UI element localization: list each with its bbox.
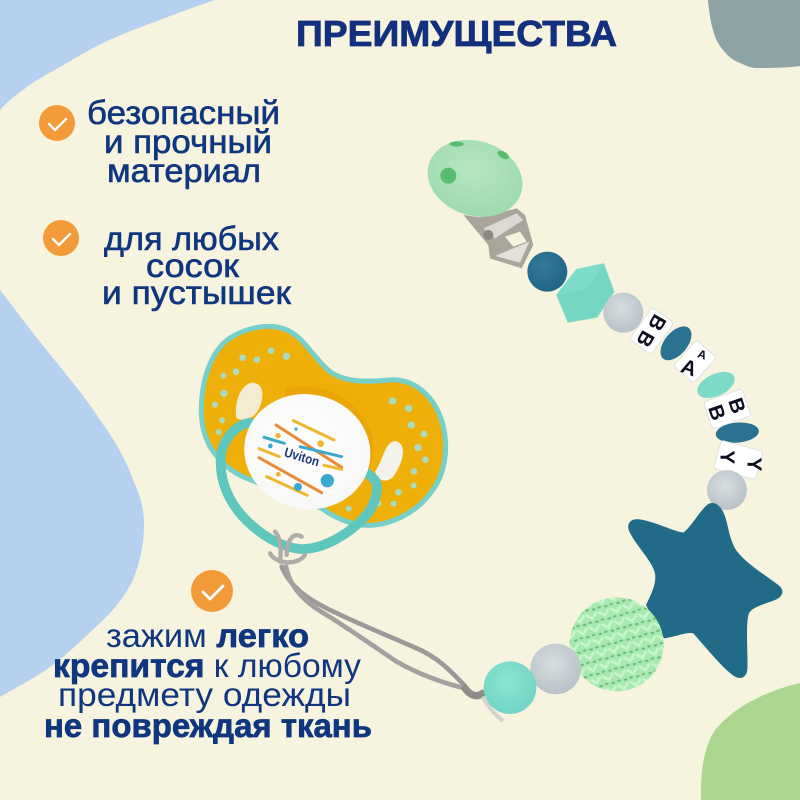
cube: B: B xyxy=(643,310,670,335)
cube: A: A xyxy=(696,347,709,363)
text: benefit 1: безопасный xyxy=(87,94,280,131)
text: benefit 2: для любых xyxy=(104,220,280,257)
title: ПРЕИМУЩЕСТВА xyxy=(296,13,617,54)
bead: grey lower xyxy=(707,470,747,510)
cube: B: B xyxy=(703,402,730,424)
text: benefit 3: не повреждая ткань xyxy=(44,707,372,744)
disc: mint xyxy=(693,367,739,403)
star bead xyxy=(628,503,782,678)
cube: Y xyxy=(711,439,771,482)
tail xyxy=(483,698,502,720)
shield xyxy=(201,326,446,525)
bead: silver xyxy=(530,644,581,694)
pacifier xyxy=(201,326,446,549)
button print xyxy=(259,421,342,495)
cube: A xyxy=(670,339,717,387)
blob: left blue xyxy=(0,290,144,697)
cube: B xyxy=(701,388,752,430)
text: benefit 3: предмету одежды xyxy=(58,676,351,713)
text: benefit 1 xyxy=(87,94,280,189)
wooden clip top xyxy=(417,128,532,229)
bead: grey xyxy=(603,293,643,333)
star and beads xyxy=(484,503,782,714)
cord strands xyxy=(282,567,465,686)
text: benefit 1: материал xyxy=(107,152,261,189)
cube: Y: Y xyxy=(716,450,739,464)
benefit 1 xyxy=(39,94,280,189)
logo: Uviton xyxy=(282,445,321,469)
icon: check 3 xyxy=(191,570,233,612)
cube: B: B xyxy=(723,395,750,417)
benefit 2 xyxy=(43,220,292,311)
icon: check 2 xyxy=(43,220,79,256)
metal clip xyxy=(463,208,533,268)
clip chain xyxy=(417,128,771,482)
text: benefit 2: и пустышек xyxy=(102,274,292,311)
cube: Y: Y xyxy=(743,458,766,472)
icon: check 1 xyxy=(39,105,75,141)
button xyxy=(233,382,381,521)
text: benefit 2: сосок xyxy=(146,247,240,284)
text: benefit 3 xyxy=(44,617,372,744)
loop on ring xyxy=(270,532,305,562)
dots xyxy=(212,347,429,512)
text: benefit 3: крепится к любому xyxy=(53,647,362,684)
blob: top right grey-green xyxy=(708,0,800,68)
blob: bottom right green xyxy=(701,683,800,800)
bead: mint xyxy=(484,661,536,714)
bead: dark xyxy=(527,252,567,292)
disc: dark xyxy=(654,321,698,366)
text: benefit 1: и прочный xyxy=(104,123,272,160)
cube: B: B xyxy=(631,326,659,351)
ring xyxy=(221,423,377,549)
text: benefit 2 xyxy=(102,220,292,311)
knot xyxy=(465,688,483,696)
blob: top left blue xyxy=(0,0,215,110)
disc: dark xyxy=(715,421,760,444)
cube: B xyxy=(629,307,674,355)
bead: hexagon xyxy=(557,264,613,322)
cord xyxy=(270,532,502,720)
cube: A: A xyxy=(678,355,700,381)
crochet bead xyxy=(570,597,664,691)
text: benefit 3: зажим легко xyxy=(106,617,309,654)
benefit 3 xyxy=(44,570,372,744)
vent holes xyxy=(236,383,262,420)
